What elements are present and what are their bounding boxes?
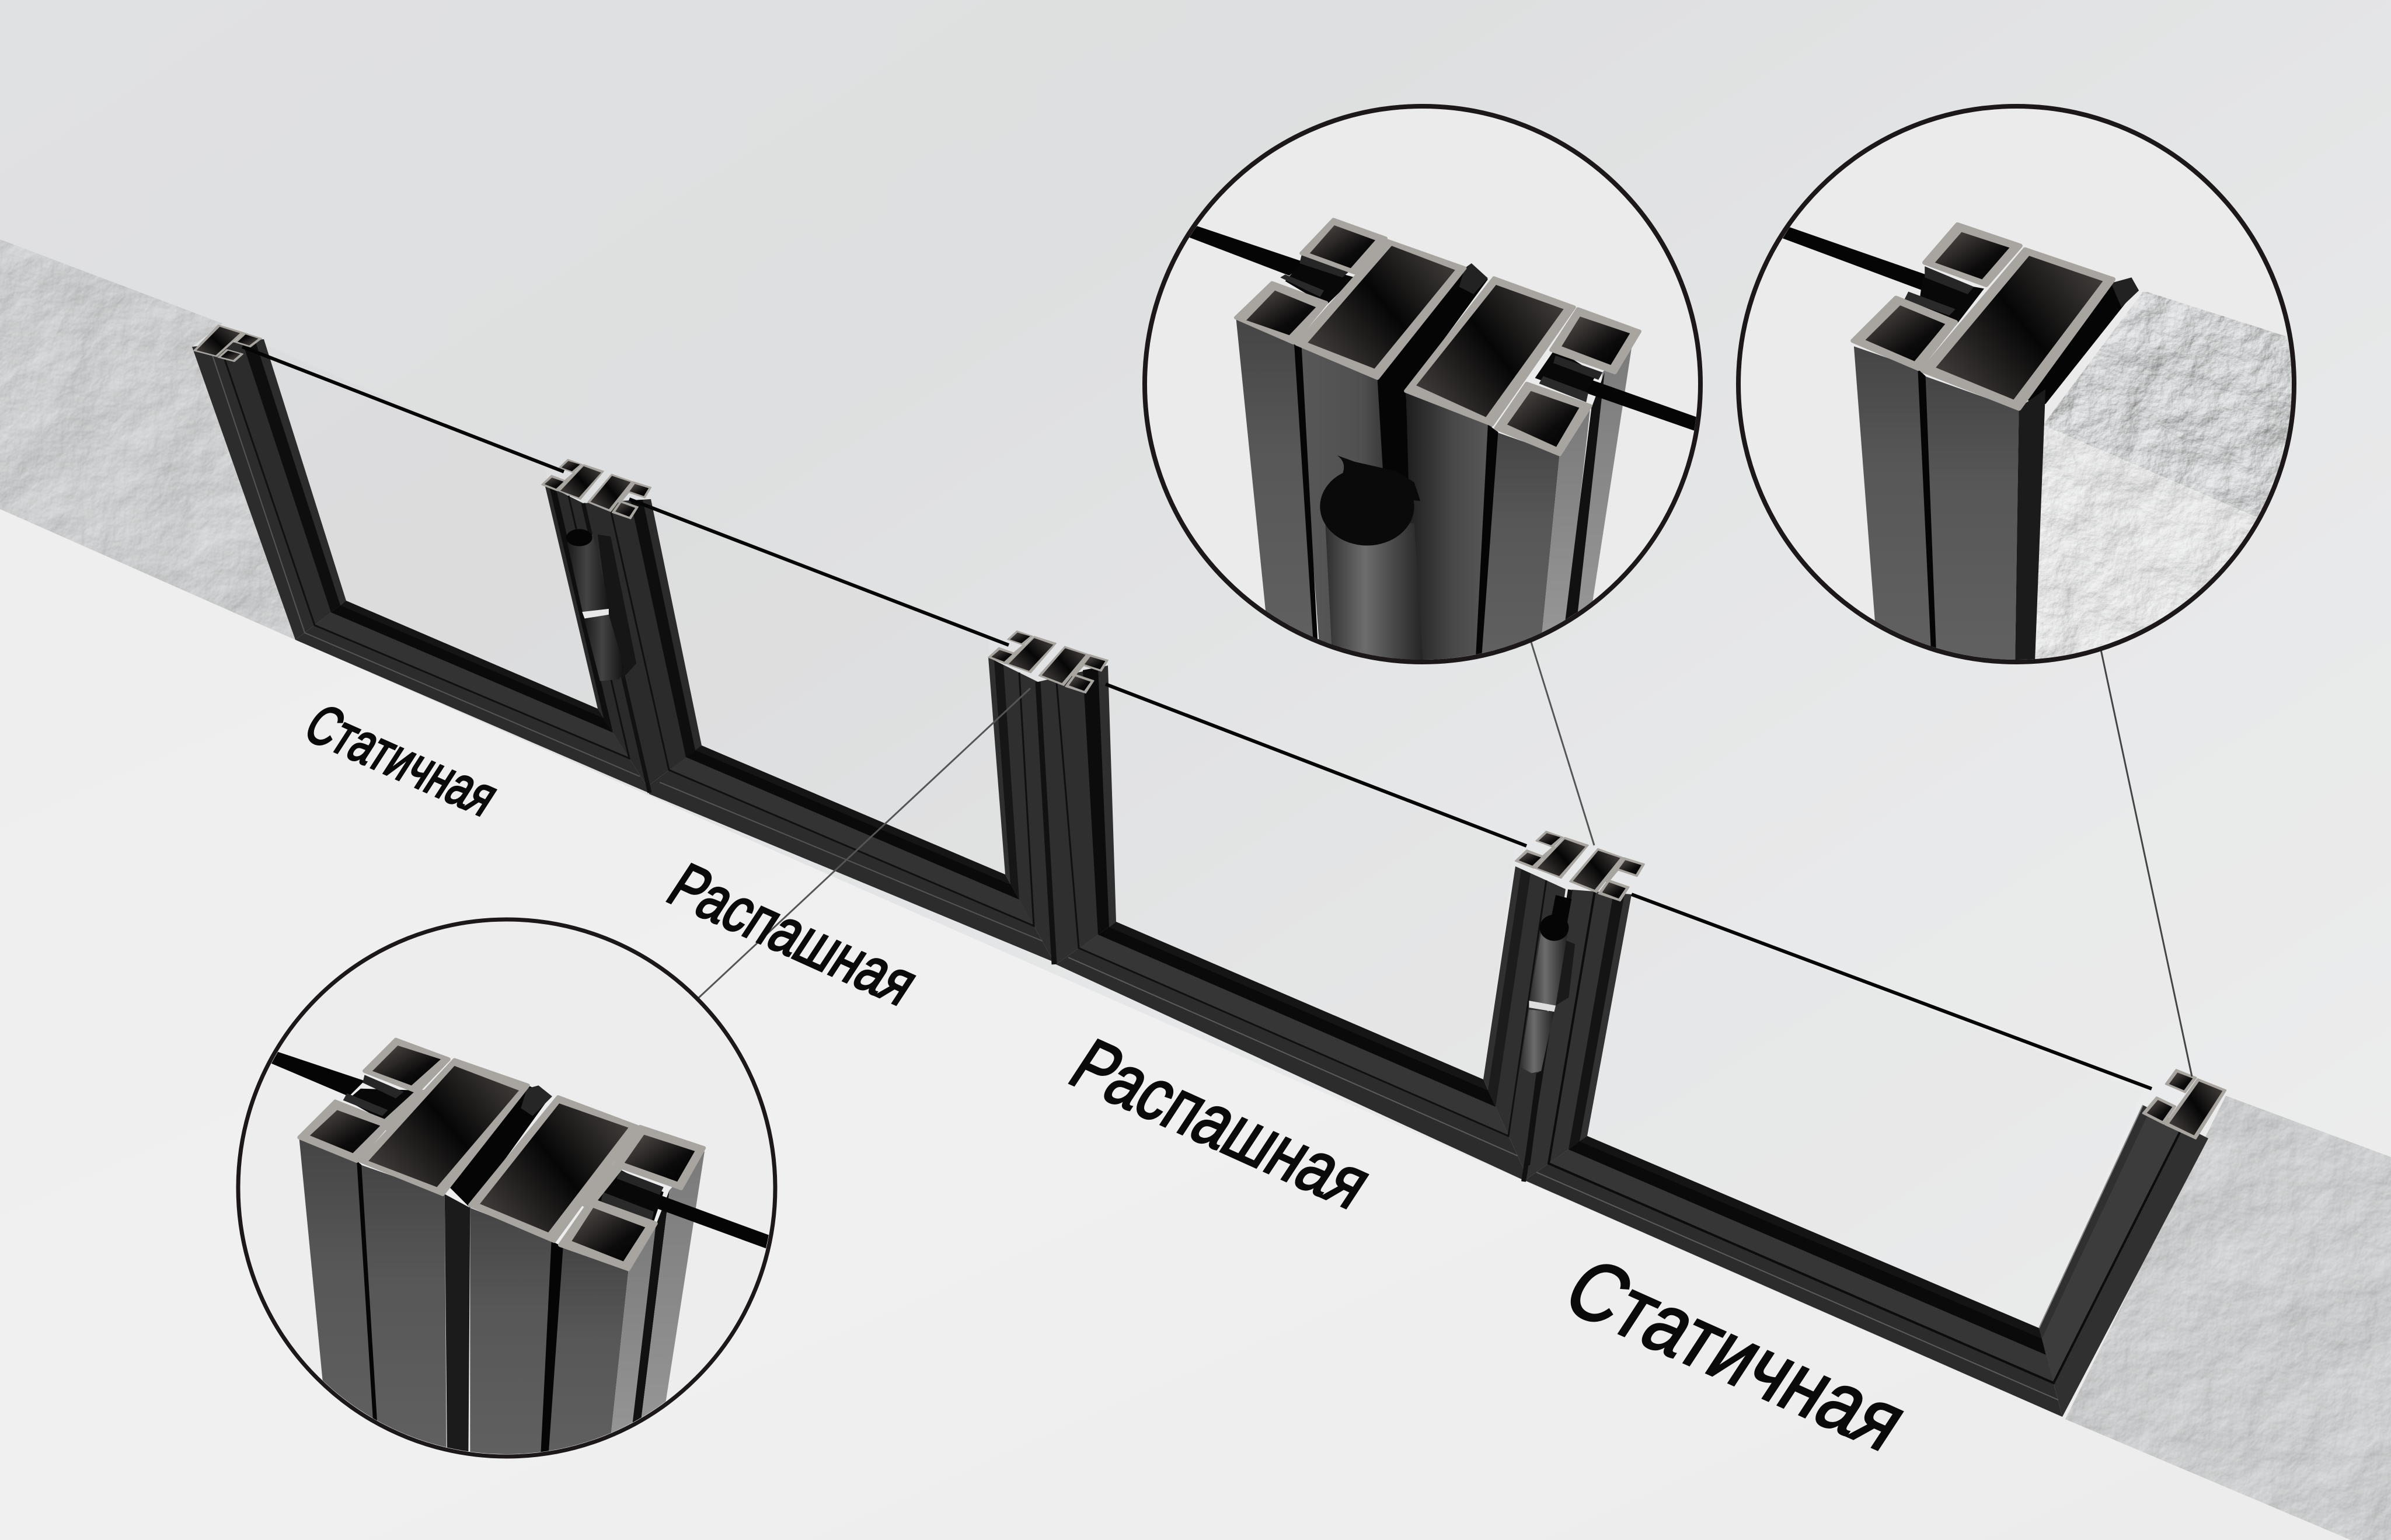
glass panes: [264, 344, 2143, 1328]
central gap: [448, 1085, 550, 1208]
central gap: [1377, 270, 1488, 683]
hinge: first joint: [566, 529, 636, 681]
glass strip, left: [271, 1051, 365, 1096]
hinge knuckle: [1320, 455, 1423, 660]
profile faces: [1236, 318, 1633, 683]
hinge: third joint: [1520, 895, 1575, 1165]
profile end cap: third joint: [1515, 831, 1644, 901]
brush seal: [521, 1085, 552, 1116]
detail circle 1: swing joint with hinge: [1145, 106, 1700, 683]
wall section: left: [0, 234, 304, 654]
profile end cap: first joint: [542, 459, 651, 519]
label: static, left: Статичная: [294, 693, 511, 827]
brush seal: [2015, 277, 2139, 683]
cover outside wall: [2147, 292, 2287, 336]
detail circle 2: wall joint: [1738, 106, 2312, 689]
profile section: [299, 1040, 704, 1269]
leader line: detail circle 3: [699, 688, 1030, 998]
profile faces: [1854, 346, 2019, 683]
frame 4: static section: [1524, 890, 2208, 1417]
glass edge line: [242, 347, 2152, 1089]
brush seal: [1459, 263, 1488, 294]
gaskets: [1904, 266, 1984, 326]
wall section: right: [2055, 1086, 2391, 1540]
leader line: detail circle 1: [1531, 642, 1594, 845]
leader line: detail circle 2: [2101, 650, 2192, 1076]
detail circle 3: centre joint: [238, 919, 775, 1491]
gaskets: [1280, 255, 1602, 402]
profile section: [1236, 219, 1639, 454]
label: static, right: Статичная: [1548, 1242, 1925, 1468]
glass strip, right: [1587, 381, 1696, 431]
glass strip, right: [607, 1179, 769, 1249]
profile section: [1853, 225, 2113, 409]
profile end cap: centre joint: [988, 631, 1108, 693]
profile end cap: left wall: [194, 325, 262, 361]
glass strip, left: [1187, 226, 1306, 276]
profile faces: [299, 1140, 705, 1491]
frame 2: swing section: [583, 499, 1051, 961]
label: swing, second: Распашная: [1056, 1024, 1388, 1224]
gaskets: [343, 1075, 664, 1221]
frame 3: swing section: [1038, 666, 1566, 1180]
glass strip: [1783, 227, 1929, 291]
profile end cap: right wall: [2143, 1069, 2226, 1138]
frame 1: static section: [192, 339, 649, 793]
label: swing, first: Распашная: [656, 851, 931, 1018]
floor surface: [0, 509, 2351, 1540]
wall plaster: [2035, 292, 2292, 659]
